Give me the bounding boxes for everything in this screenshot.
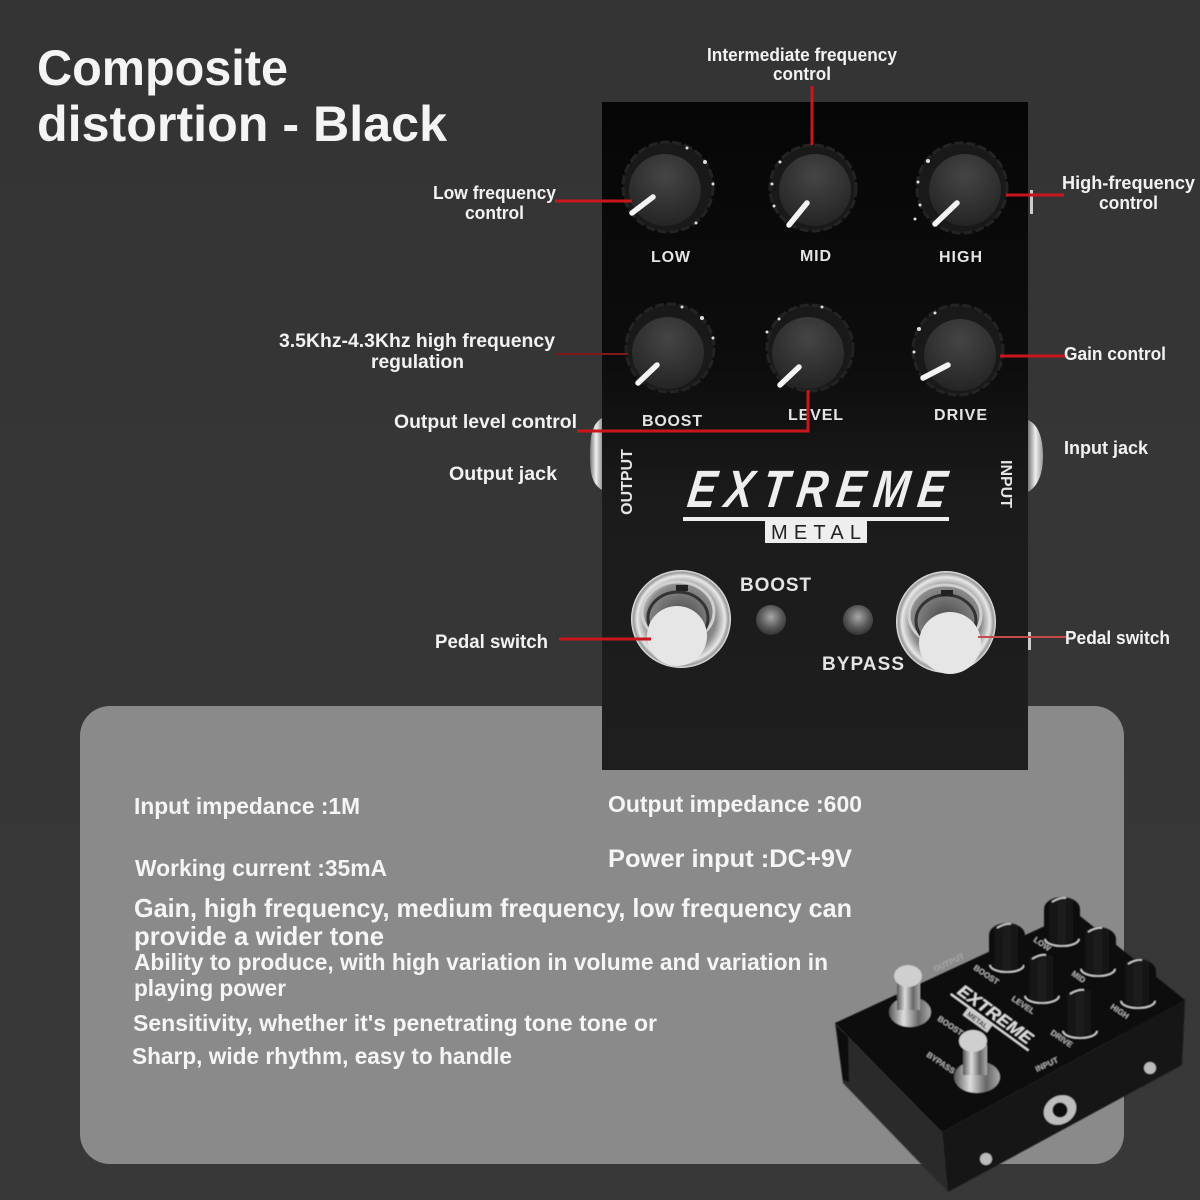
callout: output jack: Output jack <box>449 464 557 485</box>
mini labels: LEVEL <box>1010 994 1036 1016</box>
specification text: Power input :DC+9V <box>608 845 852 873</box>
knob labels: BOOST <box>642 413 702 430</box>
mini labels: DRIVE <box>1049 1028 1075 1050</box>
logo: EXTREME METAL <box>683 461 952 544</box>
callout: high-frequency control <box>1062 173 1195 213</box>
specification text: Sensitivity, whether it's penetrating tone tone or <box>133 1010 657 1036</box>
knob: DRIVE <box>912 305 1003 395</box>
mini knobs <box>989 897 1156 1038</box>
callout: high-frequency control: High-frequency <box>1062 173 1195 193</box>
label: OUTPUT: OUTPUT <box>619 449 636 515</box>
label: BYPASS LED: BYPASS <box>822 654 904 675</box>
LED: boost <box>756 605 786 635</box>
knob labels <box>642 248 987 430</box>
callout: gain control: Gain control <box>1064 344 1166 364</box>
callout: low frequency control <box>433 183 556 223</box>
specification text: Output impedance :600 <box>608 791 862 817</box>
mini labels <box>925 935 1131 1076</box>
mini jack <box>1038 1089 1082 1131</box>
main pedal <box>590 102 1043 770</box>
callout: intermediate frequency control <box>707 45 897 84</box>
knob: MID <box>770 145 856 231</box>
knob labels: LEVEL <box>788 407 843 424</box>
mini footswitch: right <box>954 1030 1000 1093</box>
label: INPUT: INPUT <box>997 460 1014 508</box>
side screws glint <box>1028 190 1033 650</box>
logo: EXTREME METAL: METAL <box>771 522 861 544</box>
pedal body <box>602 102 1028 770</box>
title: distortion - Black <box>37 96 447 152</box>
knob: LEVEL <box>766 305 853 391</box>
callout: input jack: Input jack <box>1064 438 1149 458</box>
footswitch: right <box>896 571 996 674</box>
callout: high-frequency control: control <box>1099 193 1158 213</box>
knob labels: DRIVE <box>934 407 987 424</box>
callout: high frequency regulation: 3.5Khz-4.3Khz high frequency <box>279 331 555 352</box>
mini logo: METAL <box>965 1011 989 1031</box>
callout: output level control: Output level control <box>394 412 577 433</box>
knob: LOW <box>623 142 714 232</box>
specification text: Ability to produce, with high variation in volume and variation in <box>134 949 828 975</box>
callout: low frequency control: control <box>465 203 524 223</box>
mini logo: EXTREME <box>954 981 1037 1049</box>
LED: bypass <box>843 605 873 635</box>
input jack hardware <box>1028 420 1043 492</box>
product photo: pedal in perspective <box>835 897 1185 1192</box>
mini labels: HIGH <box>1109 1002 1131 1021</box>
knob: BOOST <box>626 304 714 392</box>
specification text: Gain, high frequency, medium frequency, low frequency can <box>134 893 852 923</box>
mini screw: right <box>1144 1062 1156 1074</box>
specification text: provide a wider tone <box>134 921 384 951</box>
mini labels: MID <box>1070 969 1087 985</box>
title: Composite <box>37 40 288 96</box>
knob labels: LOW <box>651 249 691 266</box>
mini footswitch: left <box>889 965 931 1027</box>
mini labels: INPUT <box>1034 1055 1060 1074</box>
title <box>37 40 447 152</box>
mini labels: BYPASS <box>925 1050 957 1076</box>
panel: specifications background <box>80 706 1124 1164</box>
specification text <box>132 791 862 1069</box>
specification text: Input impedance :1M <box>134 793 360 819</box>
mini labels: BOOST <box>936 1014 965 1038</box>
mini labels: BOOST <box>972 963 1001 987</box>
mini labels: LOW <box>1032 935 1053 953</box>
callout: high frequency regulation <box>279 331 555 373</box>
output jack hardware <box>590 418 602 490</box>
mini labels: OUTPUT <box>932 952 966 974</box>
knob labels: HIGH <box>939 249 982 266</box>
callout: right pedal switch: Pedal switch <box>1065 628 1170 648</box>
specification text: Working current :35mA <box>135 855 387 881</box>
footswitch: left <box>631 570 731 668</box>
callout: high frequency regulation: regulation <box>371 352 464 373</box>
knob: HIGH <box>914 143 1007 233</box>
mini logo <box>945 979 1040 1059</box>
callout: left pedal switch: Pedal switch <box>435 632 548 653</box>
front face <box>942 1000 1185 1192</box>
mini screw: left <box>980 1153 992 1165</box>
knob labels: MID <box>800 248 831 265</box>
callout: intermediate frequency control: control <box>773 64 831 84</box>
callout: low frequency control: Low frequency <box>433 183 556 203</box>
side notch <box>836 1026 849 1082</box>
top face <box>835 912 1185 1132</box>
callout: intermediate frequency control: Intermediate frequency <box>707 45 897 65</box>
logo: EXTREME METAL: EXTREME <box>684 461 952 519</box>
specification text: playing power <box>134 975 286 1001</box>
callout lines <box>555 86 1066 639</box>
specification text: Sharp, wide rhythm, easy to handle <box>132 1043 512 1069</box>
left side face <box>835 1023 948 1192</box>
label: BOOST LED: BOOST <box>740 575 811 596</box>
